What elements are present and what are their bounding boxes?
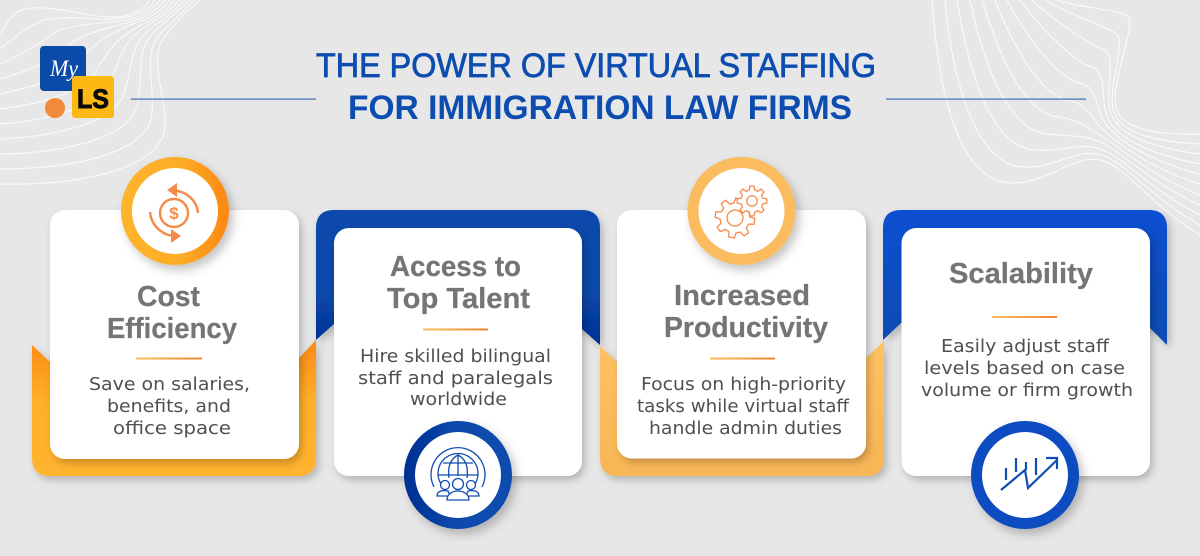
- heading: scalability: Scalability: [949, 258, 1093, 290]
- text: cost efficiency: [89, 375, 250, 439]
- text: access to top talent: Hire skilled bilingual: [360, 347, 551, 367]
- icon: dollar with arrows: [121, 157, 229, 265]
- text: access to top talent: [358, 347, 553, 410]
- text: cost efficiency: benefits, and: [107, 397, 231, 417]
- heading: cost efficiency: [107, 281, 237, 345]
- icon: dollar with arrows: $: [169, 204, 179, 223]
- text: increased productivity: Focus on high-priority: [641, 375, 846, 395]
- decorative wave lines: top right: [932, 0, 1200, 235]
- heading: cost efficiency: Efficiency: [107, 313, 237, 345]
- panel: scalability: [883, 210, 1167, 529]
- heading: increased productivity: Increased: [674, 280, 810, 312]
- panel: cost efficiency: [32, 157, 316, 476]
- title: THE POWER OF VIRTUAL STAFFING: [316, 47, 876, 85]
- text: access to top talent: staff and paralegals: [358, 369, 553, 389]
- logo: [40, 46, 114, 118]
- heading: cost efficiency: Cost: [137, 281, 200, 313]
- panel: access to top talent: [316, 210, 600, 529]
- text: access to top talent: worldwide: [410, 390, 507, 410]
- text: scalability: levels based on case: [924, 359, 1125, 379]
- icon: globe with people: [404, 421, 512, 529]
- heading: access to top talent: Access to: [390, 251, 521, 283]
- heading: access to top talent: [387, 251, 530, 315]
- text: scalability: Easily adjust staff: [941, 337, 1110, 357]
- title: [316, 47, 876, 127]
- icon: gears: [688, 157, 796, 265]
- logo: My: [49, 56, 79, 81]
- text: scalability: volume or firm growth: [921, 381, 1133, 401]
- decorative wave lines: top left: [0, 0, 200, 184]
- heading: increased productivity: [664, 280, 828, 344]
- heading: access to top talent: Top Talent: [387, 283, 530, 315]
- title rule: left: [131, 98, 316, 100]
- text: increased productivity: tasks while virtual staff: [637, 397, 850, 417]
- text: cost efficiency: office space: [113, 419, 231, 439]
- title rule: right: [886, 98, 1086, 100]
- logo: LS: [77, 84, 109, 114]
- title: FOR IMMIGRATION LAW FIRMS: [348, 89, 852, 127]
- text: cost efficiency: Save on salaries,: [89, 375, 250, 395]
- heading: increased productivity: Productivity: [664, 312, 828, 344]
- text: increased productivity: [637, 375, 850, 439]
- panel: increased productivity: [600, 157, 884, 476]
- text: increased productivity: handle admin duties: [649, 419, 842, 439]
- text: scalability: [921, 337, 1133, 401]
- icon: growth chart: [971, 421, 1079, 529]
